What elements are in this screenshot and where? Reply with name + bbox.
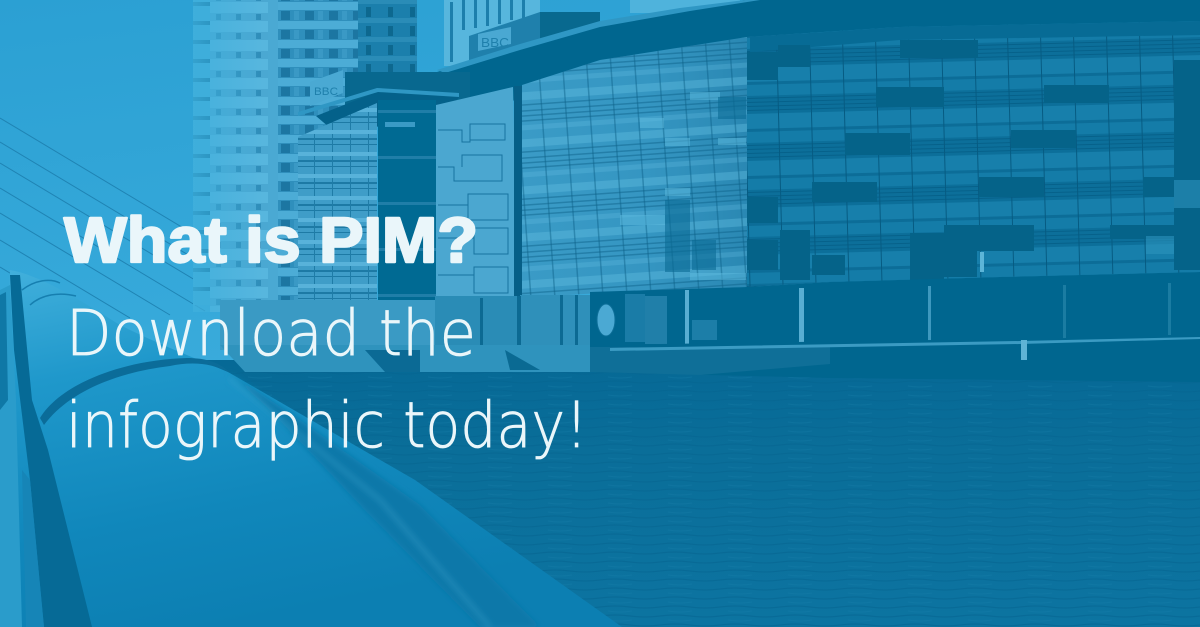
railing top ribs [22, 280, 76, 305]
emblem [597, 304, 615, 336]
sign: BBC: BBC [481, 35, 509, 50]
light office panel [436, 86, 522, 303]
heading: What is PIM? [64, 204, 478, 276]
main building roof [437, 0, 1200, 110]
railing shadow band [40, 358, 230, 425]
posts [685, 283, 1171, 345]
main glass facade: right section [747, 21, 1200, 287]
mid building facade [298, 100, 436, 312]
quay wall [220, 336, 1200, 382]
mid building block with BBC sign [298, 70, 470, 128]
roof edge [437, 0, 760, 73]
water ripples [230, 372, 1200, 627]
foreground railing [0, 270, 622, 627]
railing crease [228, 372, 540, 627]
railing left edge [10, 275, 92, 627]
water [0, 360, 1200, 627]
residential tower [193, 0, 417, 312]
ground floor [220, 272, 1200, 350]
sign: BBC box [310, 70, 343, 106]
main glass facade: left section [522, 37, 747, 298]
sign: BBC box: BBC [314, 86, 338, 98]
upper BBC building [444, 0, 740, 72]
subheading line 2: infographic today! [66, 389, 588, 462]
subheading line 1: Download the [66, 297, 476, 370]
background: bridge cables [0, 118, 290, 321]
sign: BBC [478, 27, 511, 51]
